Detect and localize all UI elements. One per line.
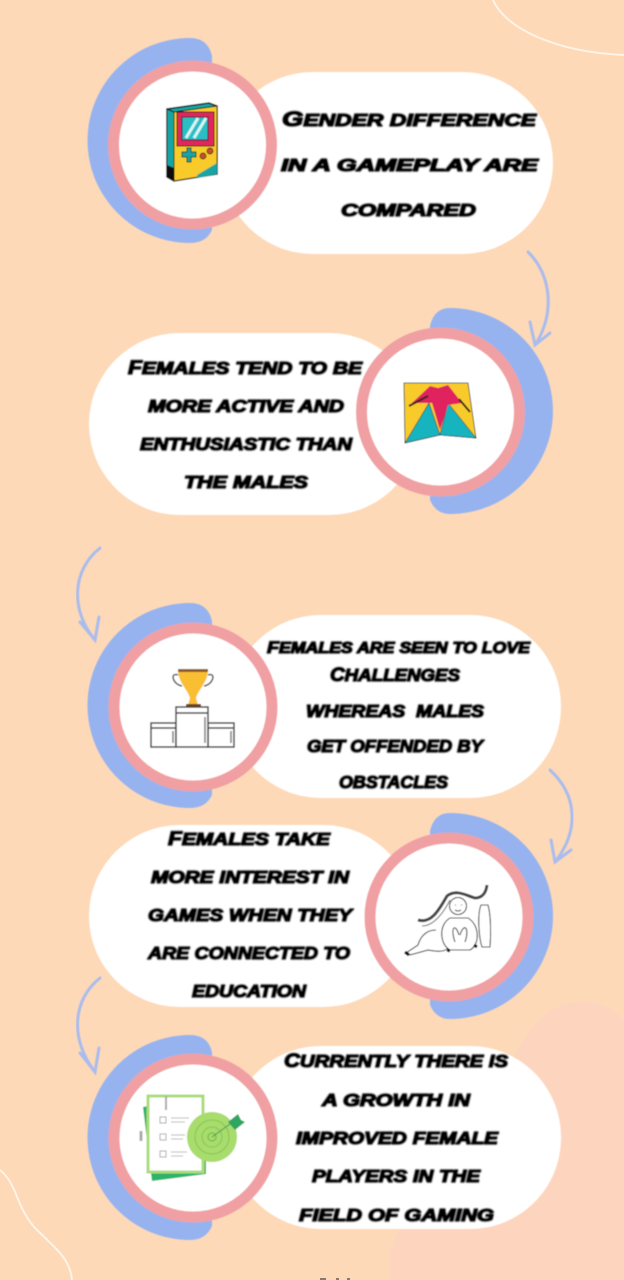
text block bbox=[281, 108, 540, 220]
blue crescent bbox=[88, 1035, 212, 1240]
text block: WHEREAS MALES bbox=[306, 701, 484, 721]
text block bbox=[147, 829, 354, 1001]
icon: sketched figures bbox=[405, 885, 491, 955]
text block bbox=[267, 638, 531, 792]
text block: FEMALES ARE SEEN TO LOVE bbox=[267, 638, 531, 657]
text block: GAMES WHEN THEY bbox=[148, 905, 354, 925]
decorative curve: top right bbox=[493, 0, 624, 55]
pink ring bbox=[114, 66, 272, 224]
icon: paper fortune teller bbox=[404, 383, 476, 443]
text block: GET OFFENDED BY bbox=[307, 736, 484, 756]
text block: FEMALES TAKE bbox=[168, 829, 332, 850]
blue crescent bbox=[430, 813, 553, 1019]
pink ring bbox=[114, 1059, 272, 1217]
pill bbox=[230, 1046, 561, 1229]
background blob bbox=[390, 1002, 624, 1280]
blue crescent bbox=[88, 38, 212, 243]
text block: COMPARED bbox=[341, 200, 476, 220]
cropped footer marks bbox=[320, 1278, 350, 1280]
panel: growth bbox=[88, 1035, 561, 1240]
icon: handheld game console bbox=[167, 103, 217, 181]
text block: CURRENTLY THERE IS bbox=[284, 1051, 508, 1072]
icon: trophy on podium bbox=[151, 669, 234, 747]
arrow: panel 4 to 5 bbox=[78, 978, 100, 1072]
pink ring bbox=[370, 838, 528, 996]
decorative curve: bottom left bbox=[0, 1170, 72, 1280]
icon: checklist and target bbox=[141, 1096, 245, 1181]
text block: EDUCATION bbox=[192, 981, 306, 1001]
blue crescent bbox=[88, 603, 212, 808]
panel: education bbox=[89, 813, 553, 1019]
text block bbox=[128, 358, 364, 492]
text block: IMPROVED FEMALE bbox=[296, 1128, 500, 1148]
pill bbox=[89, 333, 420, 515]
text block: IN A GAMEPLAY ARE bbox=[281, 155, 540, 175]
text block: CHALLENGES bbox=[330, 665, 460, 686]
text block: A GROWTH IN bbox=[321, 1090, 470, 1110]
text block: PLAYERS IN THE bbox=[312, 1166, 482, 1186]
pill bbox=[230, 615, 561, 798]
blue crescent bbox=[430, 308, 553, 514]
panel: gender difference bbox=[88, 38, 553, 254]
text block: THE MALES bbox=[184, 472, 308, 492]
text block: MORE INTEREST IN bbox=[151, 867, 349, 887]
text block: OBSTACLES bbox=[339, 772, 448, 792]
arrow: panel 3 to 4 bbox=[550, 770, 572, 862]
text block: ENTHUSIASTIC THAN bbox=[140, 434, 352, 454]
text block: ARE CONNECTED TO bbox=[147, 943, 350, 963]
arrow: panel 2 to 3 bbox=[78, 548, 100, 640]
text block: G ENDER DIFFERENCE bbox=[282, 108, 538, 131]
pink ring bbox=[362, 333, 520, 491]
panel: challenges bbox=[88, 603, 561, 808]
text block: MORE ACTIVE AND bbox=[148, 396, 344, 416]
pill bbox=[89, 825, 414, 1007]
panel: females more active bbox=[89, 308, 553, 515]
text block bbox=[284, 1051, 508, 1225]
arrow: panel 1 to 2 bbox=[528, 252, 550, 345]
pink ring bbox=[114, 628, 272, 786]
pill bbox=[222, 72, 553, 254]
text block: FIELD OF GAMING bbox=[299, 1205, 494, 1225]
text block: FEMALES TEND TO BE bbox=[128, 358, 364, 379]
